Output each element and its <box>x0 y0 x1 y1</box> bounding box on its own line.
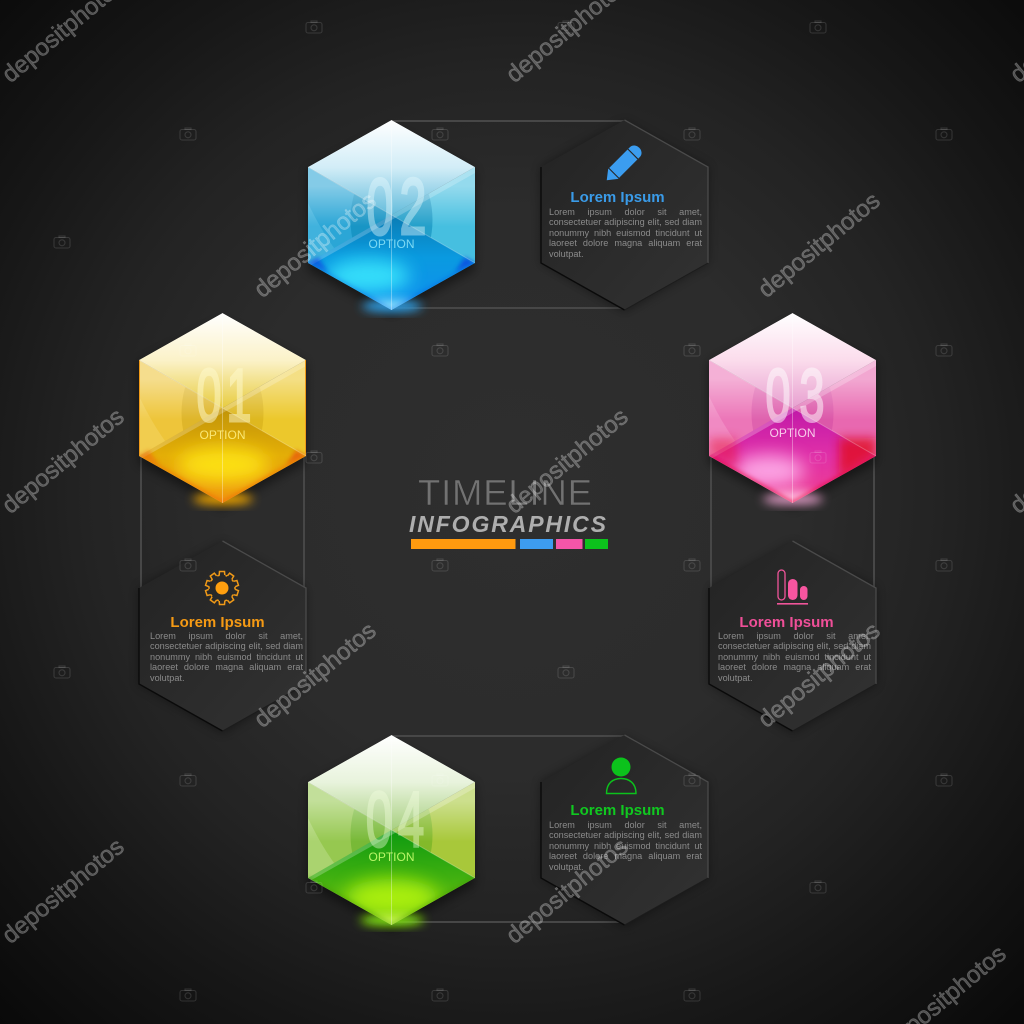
text block: card 03: nonummy nibh euismod tincidunt ut <box>718 652 871 662</box>
icon: pencil <box>602 143 644 185</box>
text block: card 03: consectetuer adipiscing elit, sed diam <box>718 641 871 651</box>
text block: card 01: Lorem ipsum dolor sit amet, <box>150 631 303 641</box>
watermark: depositphotos <box>753 617 885 733</box>
text block: card 02: nonummy nibh euismod tincidunt ut <box>549 228 702 238</box>
watermark: depositphotos <box>249 617 381 733</box>
icon: user <box>606 758 636 794</box>
panel: gem option 01 <box>138 313 308 511</box>
panel: text card 01 <box>138 540 306 732</box>
panel: gem option 02 <box>307 120 476 318</box>
heading: Lorem Ipsum green: Lorem Ipsum <box>570 802 665 819</box>
panel: gem option 01: 0 <box>197 354 221 437</box>
icon: bar chart <box>777 570 808 605</box>
text block: card 04 <box>549 820 702 872</box>
connector frame: option 01 <box>140 450 305 595</box>
watermark: depositphotos <box>249 187 381 303</box>
text block: card 01: laoreet dolore magna aliquam erat <box>150 662 303 672</box>
title <box>409 472 608 549</box>
panel: gem option 01: 1 <box>227 354 251 437</box>
panel: gem option 03: 3 <box>800 354 824 437</box>
panel: text card 03 <box>708 540 876 732</box>
text block: card 02 <box>549 207 702 259</box>
text block: card 01: consectetuer adipiscing elit, sed diam <box>150 641 303 651</box>
title: INFOGRAPHICS <box>409 511 607 537</box>
heading: Lorem Ipsum orange: Lorem Ipsum <box>170 614 265 631</box>
text block: card 02: consectetuer adipiscing elit, sed diam <box>549 217 702 227</box>
text block: card 02: volutpat. <box>549 249 584 259</box>
text block: card 04: Lorem ipsum dolor sit amet, <box>549 820 702 830</box>
text block: card 03: laoreet dolore magna aliquam erat <box>718 662 871 672</box>
panel: text card 04 <box>540 734 709 926</box>
text block: card 03: volutpat. <box>718 673 752 683</box>
text block: card 03: Lorem ipsum dolor sit amet, <box>718 631 871 641</box>
panel: gem option 01: OPTION <box>199 428 246 442</box>
panel: gem option 04: 4 <box>398 776 424 863</box>
text block: card 02: Lorem ipsum dolor sit amet, <box>549 207 702 217</box>
text block: card 04: nonummy nibh euismod tincidunt ut <box>549 841 702 851</box>
panel: gem option 03 <box>708 313 876 511</box>
text block: card 04: laoreet dolore magna aliquam erat <box>549 851 702 861</box>
text block: card 04: consectetuer adipiscing elit, sed diam <box>549 830 702 840</box>
panel: gem option 04 <box>308 735 476 932</box>
text block: card 01: volutpat. <box>150 673 184 683</box>
watermark: depositphotos <box>0 403 129 519</box>
watermark: depositphotos <box>0 833 129 949</box>
panel: gem option 04: 0 <box>366 776 392 863</box>
text block: card 04: volutpat. <box>549 862 584 872</box>
heading: Lorem Ipsum pink: Lorem Ipsum <box>739 614 834 631</box>
text block: card 02: laoreet dolore magna aliquam erat <box>549 238 702 248</box>
text block: card 01: nonummy nibh euismod tincidunt ut <box>150 652 303 662</box>
panel: gem option 03: 0 <box>766 354 790 437</box>
watermark: depositphotos <box>501 403 633 519</box>
watermark: depositphotos <box>501 833 633 949</box>
panel: gem option 02: OPTION <box>368 237 415 251</box>
heading: Lorem Ipsum blue: Lorem Ipsum <box>570 189 665 206</box>
title: TIMELINE <box>418 472 592 513</box>
panel: gem option 02: 0 <box>367 161 393 251</box>
text block: card 03 <box>718 631 871 683</box>
text block: card 01 <box>150 631 303 683</box>
connector frame: option 04 <box>391 735 624 923</box>
panel: gem option 02: 2 <box>400 161 426 251</box>
panel: text card 02 <box>540 120 708 311</box>
watermark: depositphotos <box>753 187 885 303</box>
connector frame: option 03 <box>710 450 875 595</box>
icon: gear <box>205 572 239 604</box>
connector frame: option 02 <box>391 120 624 309</box>
panel: gem option 03: OPTION <box>769 426 816 440</box>
panel: gem option 04: OPTION <box>368 850 415 864</box>
